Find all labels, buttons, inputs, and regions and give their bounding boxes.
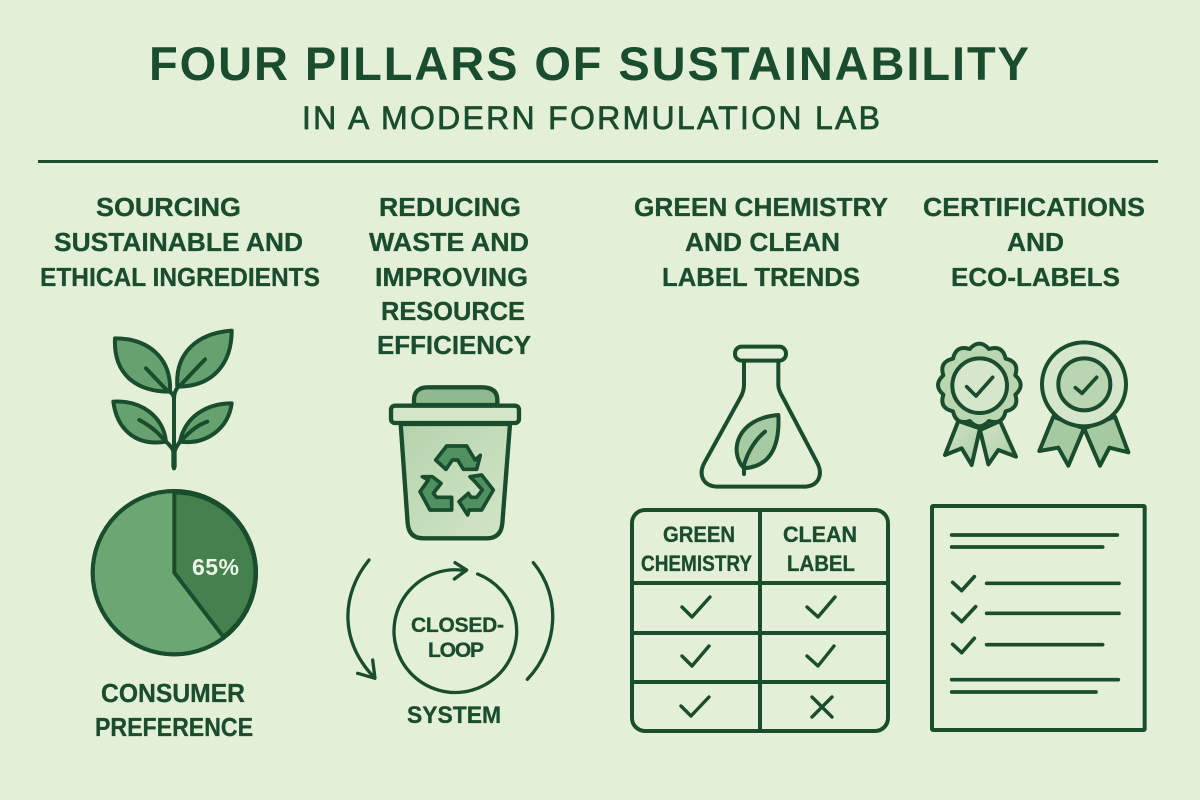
caption: consumer preference	[95, 680, 253, 742]
table grid	[632, 510, 888, 731]
panel: certifications	[923, 194, 1145, 730]
panel: reducing waste	[348, 194, 553, 729]
heading: certifications: CERTIFICATIONS	[923, 194, 1145, 222]
table header: green chemistry: GREEN	[663, 522, 735, 547]
heading: green chemistry: AND CLEAN	[685, 229, 840, 257]
icon: round badge	[1039, 342, 1128, 466]
heading: reducing waste: IMPROVING	[375, 264, 528, 292]
diagram: closed-loop arrows	[348, 560, 553, 692]
heading: sourcing: SOURCING	[96, 194, 241, 222]
heading: certifications: ECO-LABELS	[951, 264, 1120, 292]
table header: clean label: LABEL	[787, 551, 855, 576]
icon: rosette badge	[938, 344, 1021, 465]
subtitle: IN A MODERN FORMULATION LAB	[302, 100, 880, 136]
caption: system: SYSTEM	[407, 702, 501, 729]
table header: green chemistry	[641, 522, 752, 576]
document checklist	[932, 506, 1145, 730]
heading: reducing waste: WASTE AND	[369, 229, 529, 257]
pie label: 65%	[192, 554, 239, 580]
heading: green chemistry	[634, 194, 888, 292]
heading: reducing waste: RESOURCE	[381, 298, 525, 326]
caption: consumer preference: CONSUMER	[101, 680, 245, 708]
label: closed-loop: CLOSED-	[411, 614, 504, 637]
panel: green chemistry	[632, 194, 888, 731]
pie chart: consumer preference	[93, 491, 256, 654]
heading: reducing waste: EFFICIENCY	[377, 332, 531, 360]
label: closed-loop: LOOP	[428, 639, 484, 662]
caption: consumer preference: PREFERENCE	[95, 714, 253, 742]
heading: green chemistry: GREEN CHEMISTRY	[634, 194, 888, 222]
panel: sourcing	[40, 194, 320, 742]
title: FOUR PILLARS OF SUSTAINABILITY	[149, 37, 1029, 90]
table header: clean label	[783, 522, 857, 576]
heading: reducing waste: REDUCING	[379, 194, 521, 222]
icon: recycling bin	[391, 387, 519, 538]
icon: plant	[113, 331, 232, 468]
comparison table	[632, 510, 888, 731]
heading: sourcing	[40, 194, 320, 292]
table marks	[681, 597, 835, 717]
table header: clean label: CLEAN	[783, 522, 857, 547]
icon: flask with leaf	[702, 347, 820, 487]
heading: green chemistry: LABEL TRENDS	[662, 264, 860, 292]
heading: reducing waste	[369, 194, 531, 360]
heading: sourcing: SUSTAINABLE AND	[54, 229, 303, 257]
heading: sourcing: ETHICAL INGREDIENTS	[40, 264, 320, 292]
table header: green chemistry: CHEMISTRY	[641, 551, 752, 576]
heading: certifications	[923, 194, 1145, 292]
heading: certifications: AND	[1007, 229, 1064, 257]
label: closed-loop	[411, 614, 504, 662]
